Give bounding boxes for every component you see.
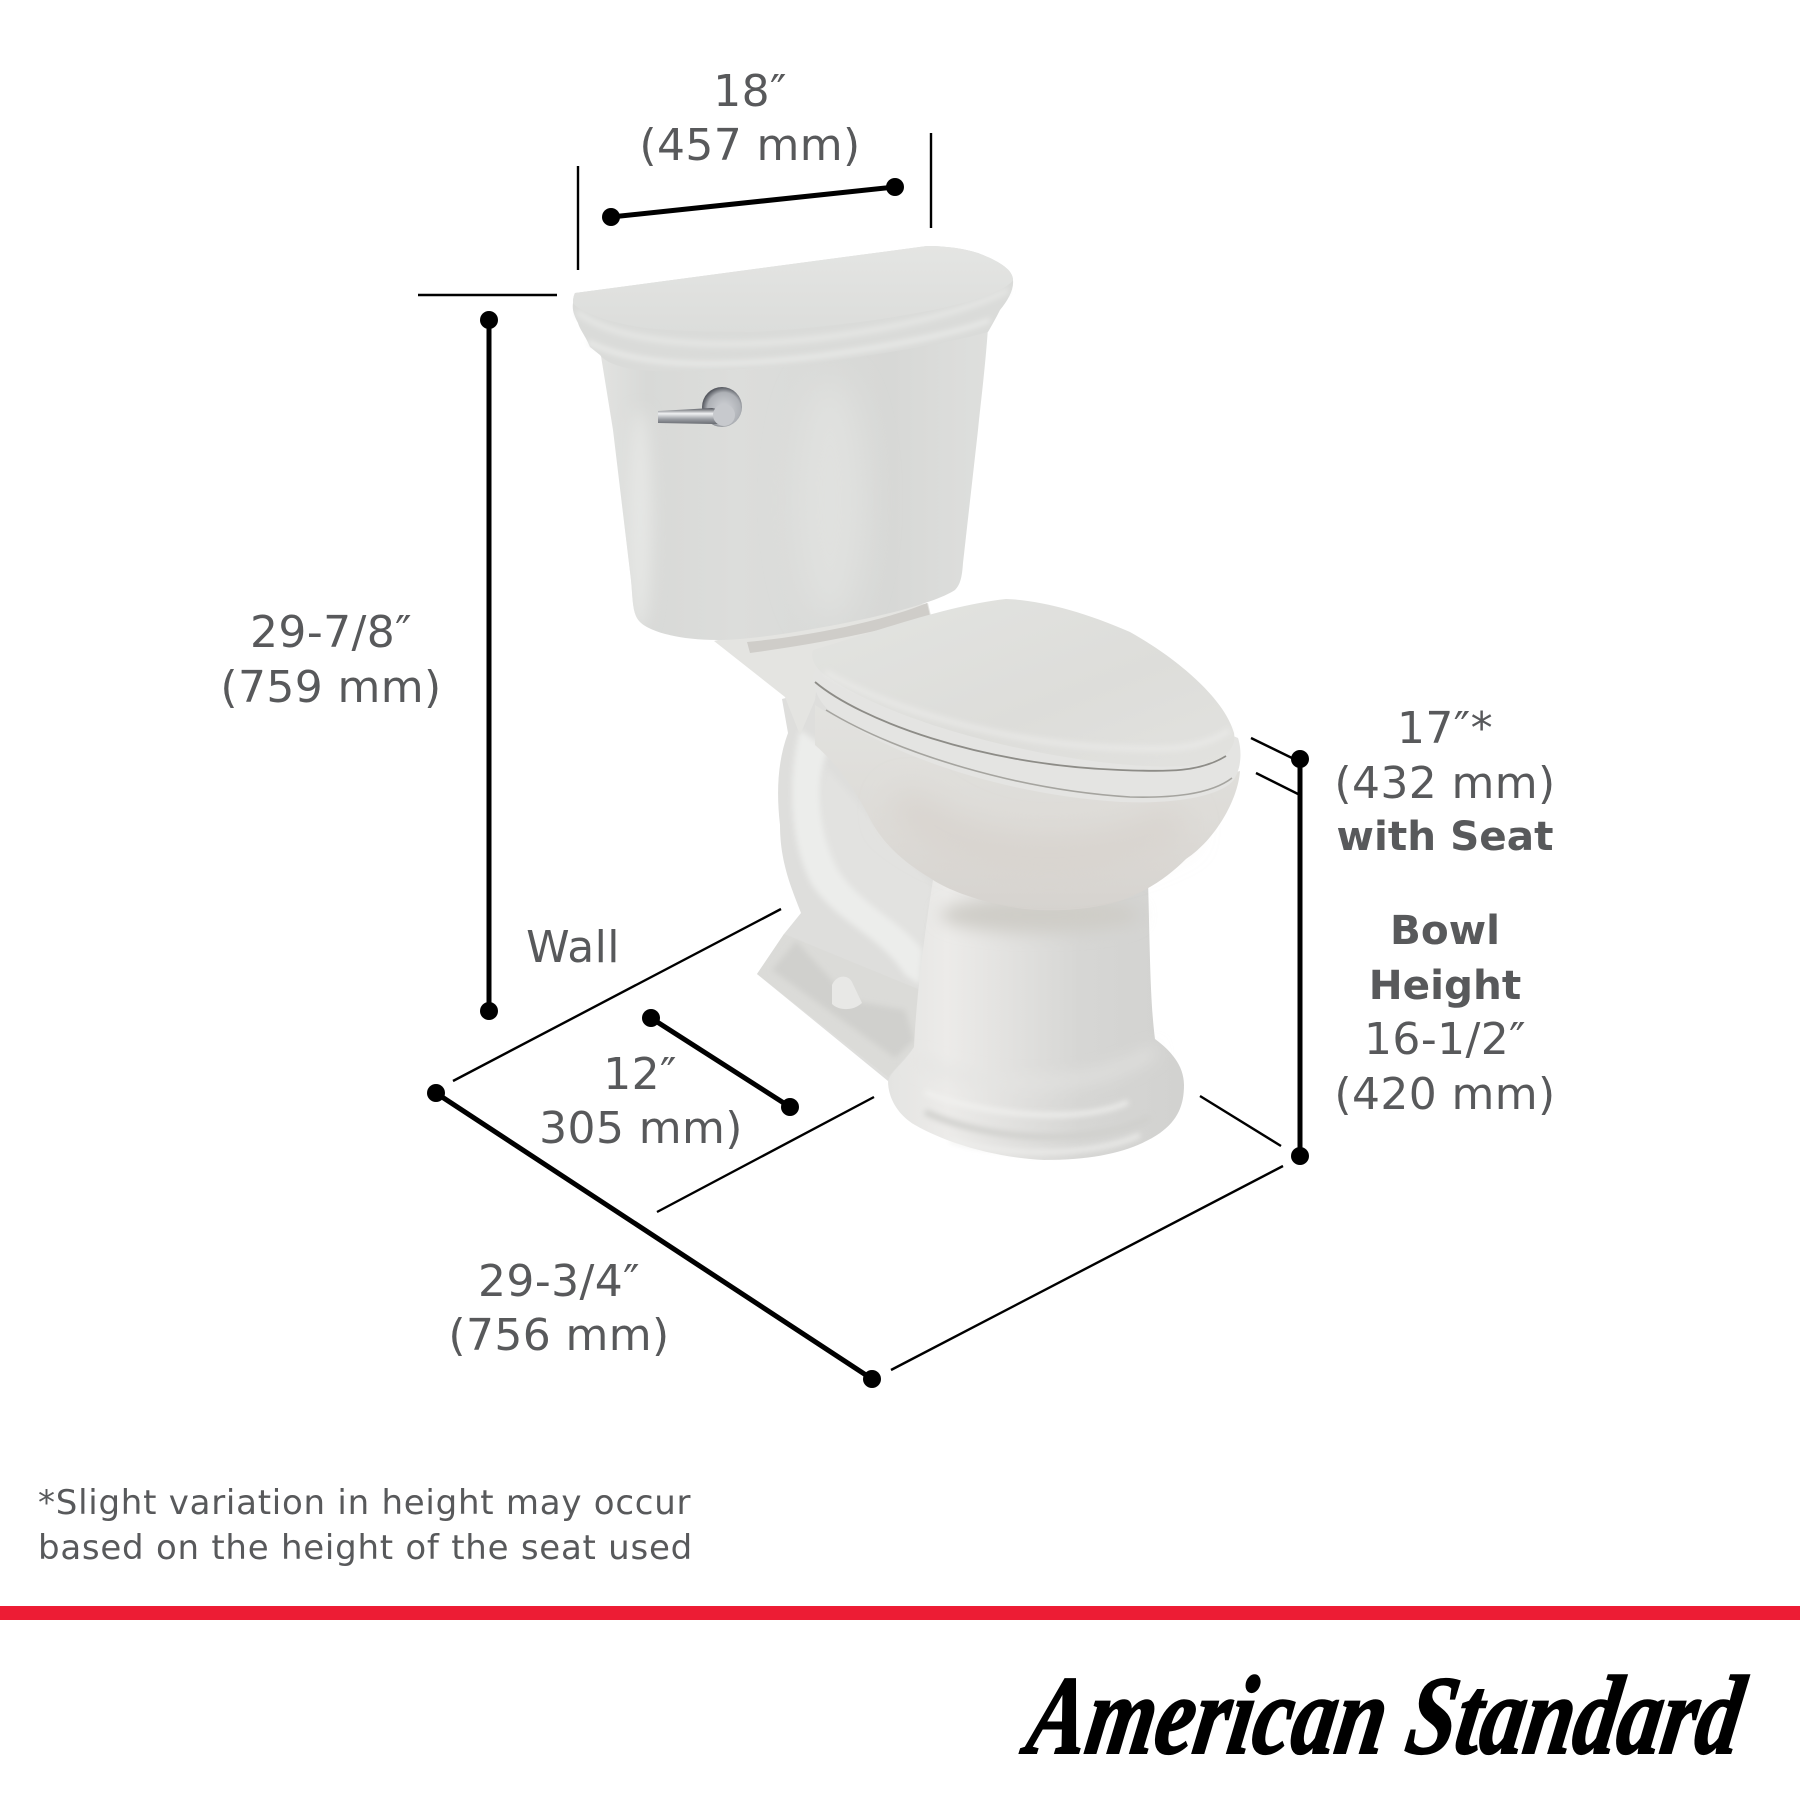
label: height with seat and bowl height: Height: [1369, 961, 1521, 1009]
dimension: rough-in: [453, 909, 874, 1212]
dimension: tank width: [578, 66, 931, 270]
label: wall: Wall: [526, 922, 620, 973]
label: 18 inches: 18″: [713, 66, 787, 117]
dimension: overall depth: [427, 1084, 1283, 1388]
pedestal and foot: [888, 880, 1184, 1160]
label: 29-3/4 inches: (756 mm): [448, 1310, 670, 1361]
label: height with seat and bowl height: with Seat: [1337, 812, 1553, 860]
red divider bar: [0, 1606, 1800, 1620]
label: 18 inches: (457 mm): [639, 120, 861, 171]
tank lid and moulding: [573, 246, 1013, 372]
tank-to-bowl neck: [714, 603, 932, 735]
toilet illustration: [573, 246, 1240, 1160]
label: height with seat and bowl height: Bowl: [1390, 906, 1500, 954]
shade under the bowl: [940, 897, 1140, 933]
footnote: based on the height of the seat used: [38, 1528, 693, 1568]
seat ring: [813, 660, 1240, 802]
label: 29-7/8 inches: 29-7/8″: [250, 607, 412, 658]
label: height with seat and bowl height: 16-1/2″: [1364, 1014, 1526, 1065]
tank body: [600, 328, 988, 640]
label: 29-3/4 inches: 29-3/4″: [478, 1256, 640, 1307]
dimension: overall height: [220, 295, 557, 1020]
dimension: seat and bowl height: [1251, 703, 1556, 1165]
label: 29-7/8 inches: (759 mm): [220, 662, 442, 713]
label: 12 inches: 305 mm): [539, 1103, 743, 1154]
floor bolt cap: [832, 977, 862, 1009]
footnote: *Slight variation in height may occur: [38, 1483, 691, 1523]
label: height with seat and bowl height: (432 mm): [1334, 758, 1556, 809]
label: height with seat and bowl height: 17″*: [1397, 703, 1493, 754]
label: 12 inches: 12″: [603, 1049, 677, 1100]
seat lid: [812, 599, 1234, 766]
label: height with seat and bowl height: (420 mm): [1334, 1069, 1556, 1120]
toilet rear column and base: [757, 690, 950, 1090]
bowl: [815, 705, 1240, 910]
chrome flush handle: [658, 387, 742, 427]
